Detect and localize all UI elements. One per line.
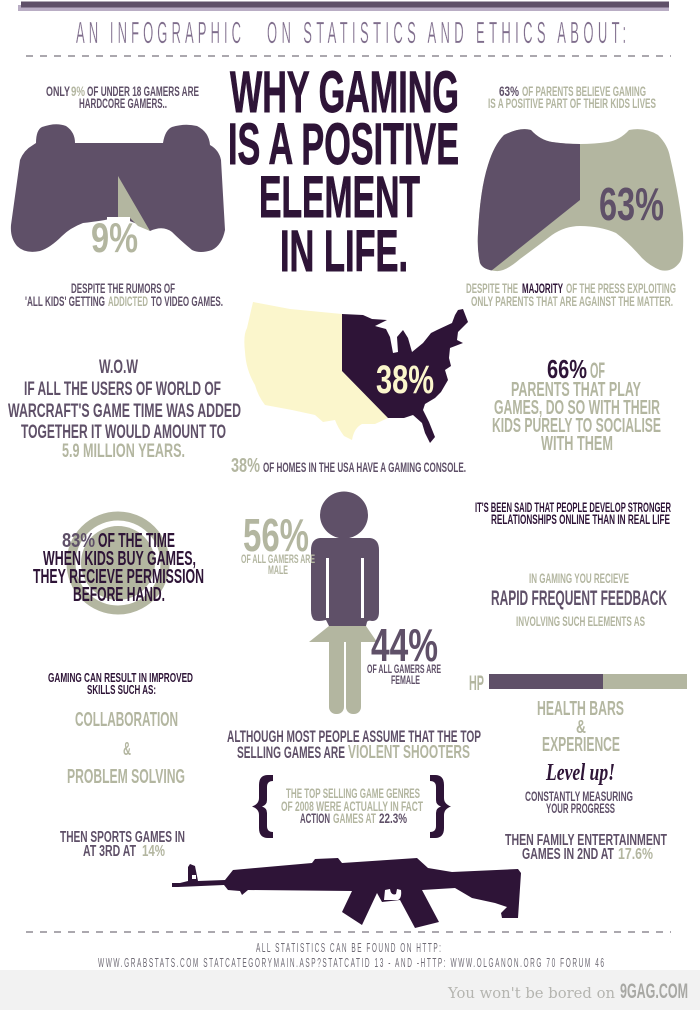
text: improved skills: [48, 670, 193, 697]
text: sports games: THEN SPORTS GAMES IN: [60, 829, 185, 846]
text: violent shooters: VIOLENT SHOOTERS: [348, 742, 470, 762]
main title: ELEMENT: [259, 165, 420, 230]
text: family entertainment: GAMES IN 2ND AT: [522, 846, 614, 863]
text: homes with console: 38%: [231, 455, 260, 477]
icon: xbox controller 63%: 63%: [599, 178, 664, 230]
text: collaboration and problem solving: &: [123, 739, 131, 759]
icon: rifle: [172, 858, 521, 928]
text: violent shooters: SELLING GAMES ARE: [237, 744, 345, 762]
text: collaboration and problem solving: PROBLEM SOLVING: [67, 766, 185, 788]
bottom strip: [0, 970, 700, 1010]
sources footer: ALL STATISTICS CAN BE FOUND ON HTTP:: [256, 942, 441, 956]
text: world of warcraft: TOGETHER IT WOULD AMOUNT TO: [21, 422, 226, 443]
health bar: HP: [469, 672, 484, 695]
header line: AN INFOGRAPHIC: [76, 16, 241, 51]
text: permission: OF THE TIME: [98, 530, 175, 552]
icon: playstation controller 9%: [11, 124, 225, 261]
text: top selling genres: OF 2008 WERE ACTUALLY IN FACT: [281, 799, 423, 814]
text: violent shooters: ALTHOUGH MOST PEOPLE ASSUME THAT THE TOP: [227, 728, 481, 746]
text: under 18 gamers: HARDCORE GAMERS..: [79, 96, 167, 111]
text: rumors of addiction: ADDICTED: [108, 294, 148, 309]
text: permission: BEFORE HAND.: [73, 584, 165, 606]
text: parents believe gaming: [488, 84, 656, 111]
icon: person figure: [309, 492, 379, 714]
text: 56% male: MALE: [268, 565, 288, 577]
text: sports games: AT 3RD AT: [83, 843, 136, 860]
text: press majority: MAJORITY: [522, 281, 563, 296]
text: collaboration and problem solving: COLLABORATION: [75, 709, 178, 731]
text: parents that play: OF: [590, 358, 605, 383]
text: world of warcraft: IF ALL THE USERS OF WORLD OF: [24, 379, 221, 400]
main title: IN LIFE.: [280, 219, 408, 284]
icon: left brace: [252, 775, 273, 838]
text: world of warcraft: W.O.W: [99, 357, 138, 378]
text: health bars and experience: EXPERIENCE: [542, 734, 620, 756]
text: health bars and experience: HEALTH BARS: [537, 698, 624, 720]
text: sports games: [60, 829, 185, 860]
text: parents that play: [492, 354, 661, 455]
text: family entertainment: [505, 832, 667, 863]
text: parents that play: WITH THEM: [541, 433, 613, 455]
text: rumors of addiction: [25, 281, 223, 309]
text: 56% male: OF ALL GAMERS ARE: [241, 554, 315, 566]
text: world of warcraft: 5.9 MILLION YEARS.: [62, 441, 185, 462]
sources footer: WWW.GRABSTATS.COM STATCATEGORYMAIN.ASP?STATCATID 13 - AND -HTTP: WWW.OLGANON.ORG 70 FORUM 46: [98, 957, 604, 971]
text: press majority: DESPITE THE: [466, 281, 518, 296]
text: under 18 gamers: [46, 84, 199, 111]
text: world of warcraft: [8, 357, 241, 462]
main title: IS A POSITIVE: [228, 112, 459, 177]
sources footer: [98, 942, 604, 971]
text: homes with console: OF HOMES IN THE USA HAVE A GAMING CONSOLE.: [263, 460, 466, 475]
header line: ON STATISTICS AND ETHICS ABOUT:: [267, 16, 626, 51]
text: 56% male: 56%: [243, 509, 309, 561]
icon: playstation controller 9%: 9%: [91, 214, 138, 261]
text: sports games: 14%: [142, 843, 165, 860]
text: rapid feedback: [491, 570, 667, 629]
text: top selling genres: THE TOP SELLING GAME GENRES: [286, 786, 420, 801]
text: rumors of addiction: TO VIDEO GAMES.: [151, 294, 223, 309]
text: health bars and experience: &: [576, 717, 586, 737]
text: improved skills: SKILLS SUCH AS:: [87, 682, 156, 697]
main title: [228, 60, 459, 284]
icon: right brace: [430, 775, 451, 838]
text: health bars and experience: [537, 698, 624, 756]
text: 44% female: OF ALL GAMERS ARE: [367, 664, 441, 676]
text: parents that play: 66%: [547, 354, 587, 384]
text: under 18 gamers: OF UNDER 18 GAMERS ARE: [87, 84, 199, 99]
text: top selling genres: 22.3%: [379, 811, 407, 826]
text: permission: THEY RECIEVE PERMISSION: [33, 566, 204, 588]
text: improved skills: GAMING CAN RESULT IN IMPROVED: [48, 670, 193, 685]
text: under 18 gamers: ONLY: [46, 84, 70, 99]
text: top selling genres: GAMES AT: [333, 811, 376, 826]
main title: WHY GAMING: [230, 60, 459, 125]
text: top selling genres: ACTION: [300, 811, 330, 826]
text: press majority: [466, 281, 676, 309]
text: 56% male: [241, 509, 315, 577]
text: collaboration and problem solving: [67, 709, 185, 788]
text: rumors of addiction: 'ALL KIDS' GETTING: [25, 294, 105, 309]
text: 44% female: 44%: [371, 619, 438, 671]
text: permission: WHEN KIDS BUY GAMES,: [43, 548, 196, 570]
icon: usa map 38%: 38%: [376, 358, 434, 402]
text: top selling genres: [281, 786, 423, 826]
health bar: [469, 672, 687, 695]
text: permission: 83%: [62, 530, 95, 552]
text: under 18 gamers: 9%: [71, 84, 85, 99]
text: world of warcraft: WARCRAFT'S GAME TIME WAS ADDED: [8, 401, 241, 422]
text: measuring progress: YOUR PROGRESS: [546, 801, 615, 816]
text: measuring progress: [525, 789, 633, 816]
text: parents believe gaming: 63%: [499, 84, 519, 99]
icon: target: [71, 516, 165, 610]
text: violent shooters: [227, 728, 481, 762]
icon: usa map 38%: [244, 302, 468, 443]
text: rumors of addiction: DESPITE THE RUMORS OF: [71, 281, 175, 296]
text: stronger relationships: [475, 500, 671, 527]
top bar: [18, 2, 669, 11]
header line: [76, 16, 626, 51]
text: 44% female: [367, 619, 441, 687]
text: level up: Level up!: [545, 760, 615, 786]
text: homes with console: [231, 455, 466, 477]
bottom strip: You won't be bored on: [447, 984, 615, 1002]
text: rapid feedback: IN GAMING YOU RECIEVE: [529, 570, 629, 586]
text: measuring progress: CONSTANTLY MEASURING: [525, 789, 633, 804]
text: permission: [33, 530, 204, 606]
text: 44% female: FEMALE: [391, 675, 420, 687]
text: family entertainment: 17.6%: [618, 846, 653, 863]
icon: xbox controller 63%: [478, 129, 683, 271]
